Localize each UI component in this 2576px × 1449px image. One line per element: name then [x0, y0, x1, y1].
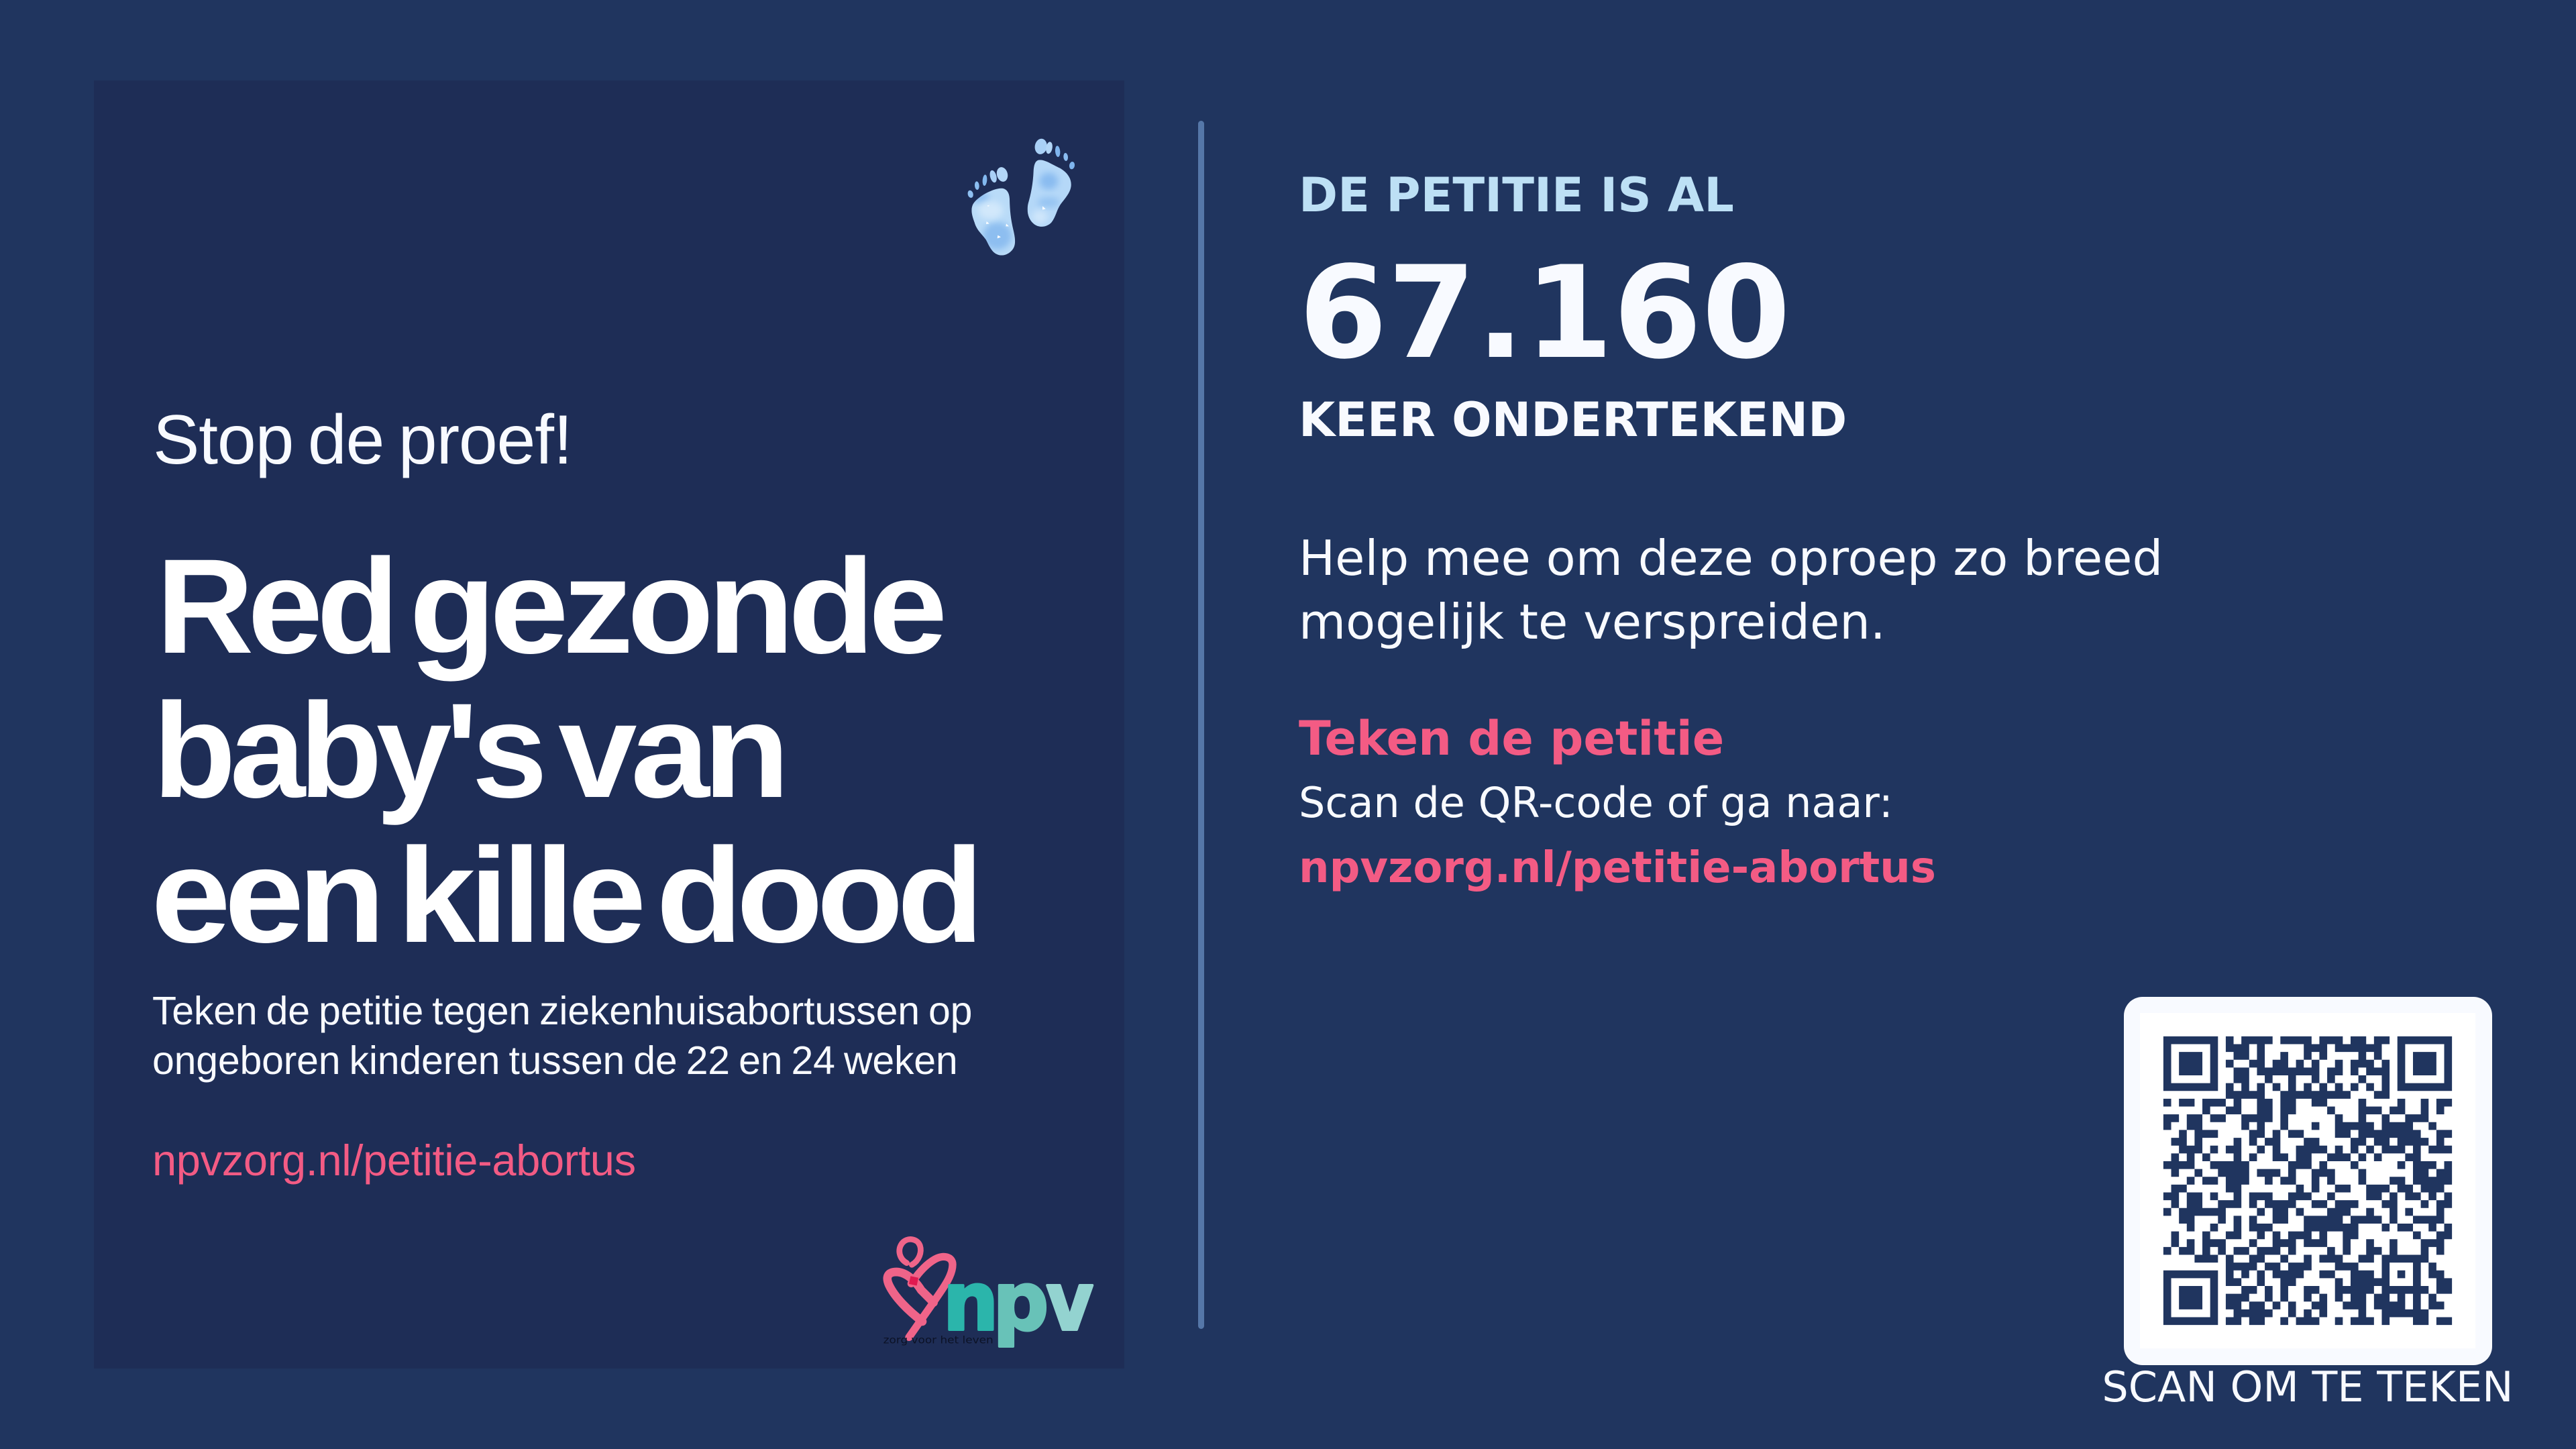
- poster headline: gezonde: [409, 531, 943, 682]
- logo mark: centre knot: [909, 1276, 918, 1285]
- sign heading: Teken de petitie: [1299, 711, 1724, 766]
- logo wordmark: v: [1046, 1256, 1093, 1349]
- petition counter: [1299, 168, 1847, 447]
- poster description: Teken de petitie tegen ziekenhuisabortussen op: [152, 989, 972, 1033]
- poster link: npvzorg.nl/petitie-abortus: [152, 1136, 636, 1185]
- panel: campaign poster: [94, 80, 1124, 1368]
- poster description: [152, 989, 972, 1083]
- poster headline: kille: [397, 820, 641, 971]
- poster description: ongeboren kinderen tussen de 22 en 24 weken: [152, 1038, 958, 1083]
- logo wordmark: p: [993, 1256, 1049, 1349]
- logo: npv: [883, 1239, 1093, 1349]
- logo mark: heart and figure: [888, 1239, 953, 1337]
- QR code: [2163, 1040, 2452, 1321]
- poster headline: van: [558, 675, 784, 826]
- poster headline: baby's: [153, 675, 542, 826]
- petition url: npvzorg.nl/petitie-abortus: [1299, 843, 1936, 893]
- call to action text: Help mee om deze oproep zo breed: [1299, 530, 2163, 586]
- scan instruction: Scan de QR-code of ga naar:: [1299, 778, 1893, 827]
- call to action text: [1299, 530, 2163, 650]
- poster headline: dood: [656, 820, 977, 971]
- counter label top: DE PETITIE IS AL: [1299, 168, 1734, 223]
- logo tagline: zorg voor het leven: [883, 1334, 994, 1346]
- logo wordmark: [943, 1256, 1093, 1349]
- divider: [1198, 121, 1204, 1329]
- icon: baby feet: [967, 138, 1075, 260]
- poster headline: een: [151, 820, 379, 971]
- counter label bottom: KEER ONDERTEKEND: [1299, 392, 1847, 447]
- QR card: [2124, 997, 2492, 1365]
- logo wordmark: n: [943, 1256, 999, 1349]
- call to action text: mogelijk te verspreiden.: [1299, 594, 1886, 650]
- poster headline: Red: [156, 531, 393, 682]
- kicker: Stop de proef!: [153, 401, 572, 479]
- counter number: 67.160: [1299, 239, 1790, 387]
- poster headline: [151, 531, 977, 971]
- QR caption: SCAN OM TE TEKEN: [2102, 1362, 2514, 1411]
